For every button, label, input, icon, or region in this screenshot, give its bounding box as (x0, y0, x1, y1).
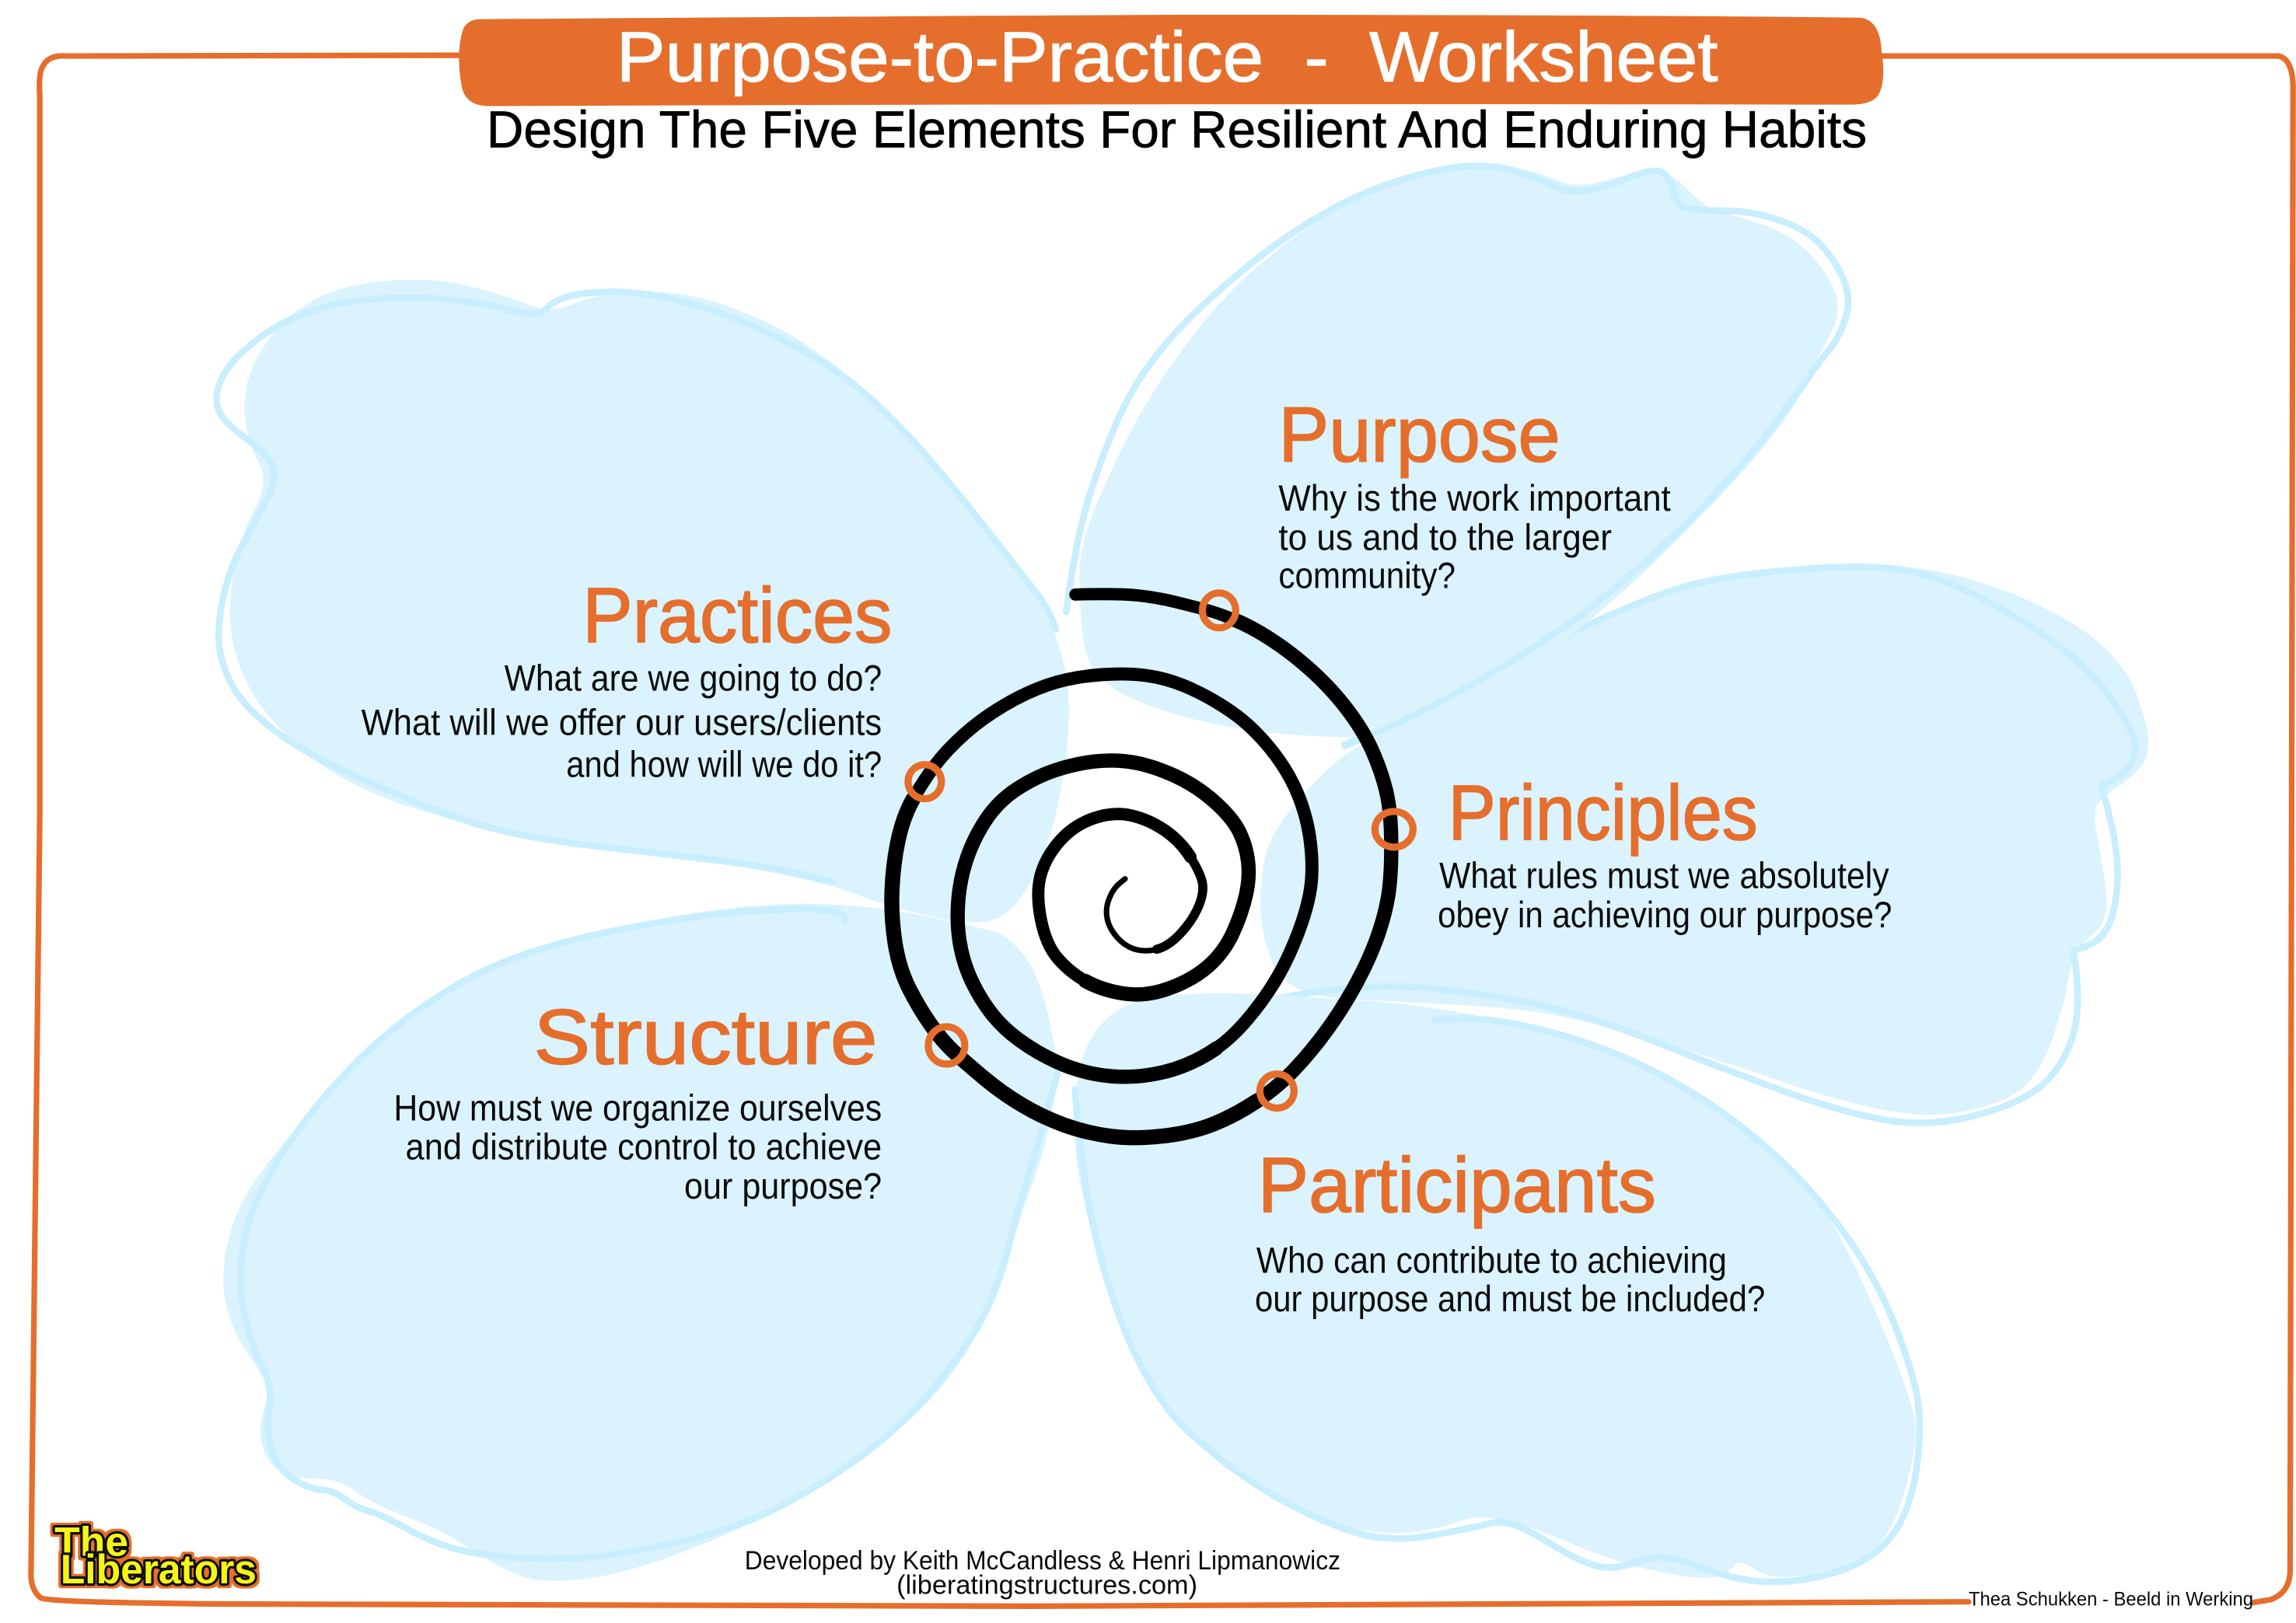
purpose question (1278, 478, 1671, 597)
panel: purpose (1066, 163, 1848, 746)
principles question: What rules must we absolutely (1439, 856, 1889, 897)
structure question: How must we organize ourselves (393, 1087, 882, 1129)
structure question: our purpose? (684, 1166, 882, 1207)
principles petal (1260, 564, 2148, 1123)
illustrator credit: Thea Schukken - Beeld in Werking (1969, 1589, 2253, 1610)
logo: The Liberators: The (54, 1520, 128, 1565)
panel: principles (1260, 564, 2148, 1123)
participants question (1255, 1241, 1765, 1320)
logo: The Liberators (54, 1520, 257, 1593)
ring: practices marker (908, 765, 942, 799)
practices question: What are we going to do? (505, 658, 882, 700)
credit: Developed by Keith McCandless & Henri Lipmanowicz (745, 1546, 1340, 1576)
purpose petal (1066, 163, 1848, 746)
practices question (362, 658, 882, 786)
panel: participants (1075, 993, 1920, 1582)
structure question: and distribute control to achieve (406, 1127, 882, 1168)
ring: structure marker (928, 1027, 965, 1064)
participants question: our purpose and must be included? (1255, 1279, 1765, 1320)
title banner: Purpose-to-Practice - Worksheet (617, 18, 1718, 96)
structure petal (223, 904, 1059, 1581)
principles question (1438, 856, 1892, 936)
practices question: What will we offer our users/clients (362, 702, 882, 743)
title banner (459, 15, 1883, 106)
practices question: and how will we do it? (566, 745, 882, 786)
structure question (393, 1087, 882, 1207)
credit: (liberatingstructures.com) (896, 1570, 1197, 1600)
panel: structure (223, 904, 1059, 1581)
panel: practices (217, 280, 1069, 922)
participants petal (1075, 993, 1920, 1582)
structure heading: Structure (534, 993, 877, 1080)
purpose question: to us and to the larger (1278, 517, 1612, 558)
purpose heading: Purpose (1278, 392, 1560, 479)
ring: purpose marker (1202, 593, 1235, 628)
practices petal (217, 280, 1069, 922)
participants question: Who can contribute to achieving (1256, 1241, 1727, 1282)
principles heading: Principles (1448, 770, 1758, 857)
purpose question: Why is the work important (1278, 478, 1671, 519)
logo: The Liberators: Liberators (61, 1547, 257, 1593)
purpose question: community? (1278, 556, 1456, 597)
subtitle: Design The Five Elements For Resilient And Enduring Habits (487, 102, 1867, 159)
ring: principles marker (1375, 812, 1413, 847)
practices heading: Practices (582, 572, 892, 659)
principles question: obey in achieving our purpose? (1438, 895, 1892, 936)
ring: participants marker (1260, 1074, 1294, 1108)
participants heading: Participants (1258, 1142, 1656, 1229)
spiral (892, 593, 1413, 1138)
credit (745, 1546, 1340, 1600)
